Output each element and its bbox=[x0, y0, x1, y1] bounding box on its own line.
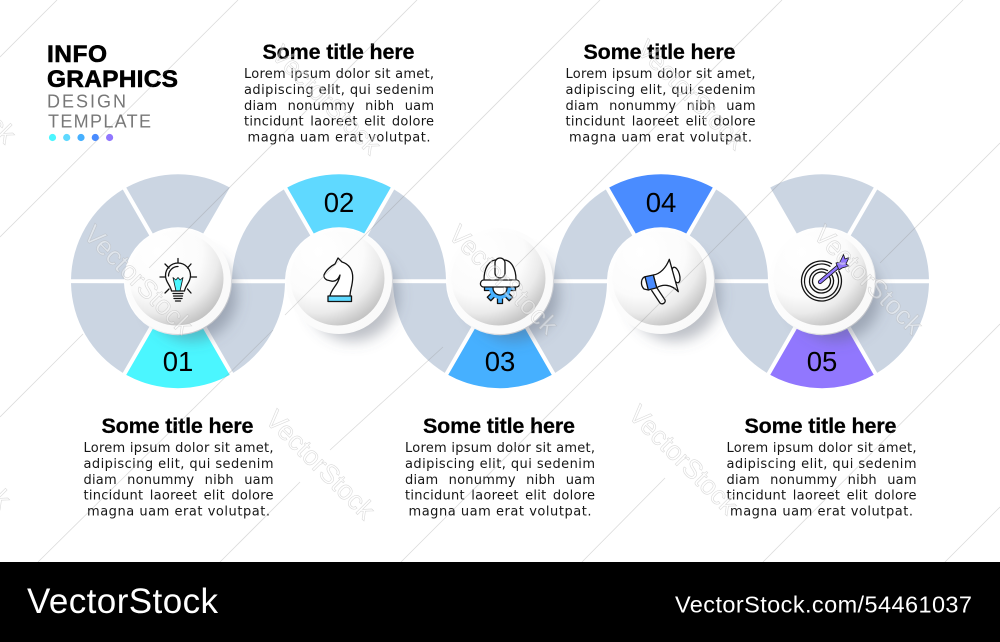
number 02: 02 bbox=[324, 187, 354, 218]
header: info graphics design template: TEMPLATE bbox=[48, 112, 151, 132]
text block 03: diam nonummy nibh uam bbox=[405, 473, 595, 488]
text block 03: tincidunt laoreet elit dolore bbox=[405, 489, 595, 504]
icon: light bulb bbox=[160, 258, 196, 301]
text block 03: adipiscing elit, qui sedenim bbox=[405, 457, 595, 472]
text block 01: adipiscing elit, qui sedenim bbox=[84, 457, 274, 472]
sphere 1 bbox=[125, 228, 237, 341]
watermark: VectorStock text bbox=[0, 28, 1000, 526]
watermark: VectorStock text: VectorStock bbox=[78, 219, 199, 341]
text block 05: adipiscing elit, qui sedenim bbox=[726, 457, 916, 472]
icon: chess knight bbox=[324, 258, 353, 302]
header: info graphics design template: INFO bbox=[47, 41, 107, 68]
text block 02: magna uam erat volutpat. bbox=[248, 130, 430, 146]
number 04: 04 bbox=[646, 187, 676, 218]
watermark: VectorStock text: VectorStock bbox=[266, 39, 387, 161]
footer bar: VectorStock bbox=[27, 582, 218, 621]
text block 02: diam nonummy nibh uam bbox=[244, 99, 434, 114]
text block 05: Some title here bbox=[744, 414, 897, 438]
text block 04: magna uam erat volutpat. bbox=[569, 130, 752, 146]
icon: target with arrow bbox=[801, 254, 849, 301]
text block 01: Some title here bbox=[102, 414, 254, 438]
text block 04: adipiscing elit, qui sedenim bbox=[566, 83, 756, 98]
text block 05: magna uam erat volutpat. bbox=[730, 504, 913, 520]
text block 05 bbox=[726, 414, 916, 520]
text block 01: Lorem ipsum dolor sit amet, bbox=[84, 441, 274, 456]
ring segments: circle 1 bbox=[45, 143, 285, 420]
footer bar bbox=[0, 562, 1000, 642]
icon: helmet and gear bbox=[480, 258, 520, 304]
watermark: VectorStock text: VectorStock bbox=[443, 219, 564, 341]
text block 05: diam nonummy nibh uam bbox=[726, 473, 916, 488]
text block 04: diam nonummy nibh uam bbox=[566, 99, 756, 114]
number 03: 03 bbox=[485, 346, 515, 377]
header: info graphics design template: DESIGN bbox=[47, 92, 126, 112]
header: info graphics design template: GRAPHICS bbox=[47, 66, 178, 93]
ring segments: circle 2 bbox=[232, 143, 472, 302]
text block 04 bbox=[566, 40, 756, 146]
watermark: VectorStock text: VectorStock bbox=[623, 399, 744, 521]
icon: megaphone bbox=[641, 259, 682, 304]
text block 03: magna uam erat volutpat. bbox=[408, 504, 592, 520]
sphere 4 bbox=[608, 228, 720, 341]
text block 02 bbox=[244, 40, 434, 146]
watermark: VectorStock text: VectorStock bbox=[260, 404, 381, 526]
sphere 3 bbox=[447, 228, 559, 341]
text block 03: Lorem ipsum dolor sit amet, bbox=[405, 441, 595, 456]
sphere 2 bbox=[286, 228, 398, 341]
ring segments: circle 4 bbox=[554, 143, 794, 302]
footer bar: VectorStock.com/54461037 bbox=[675, 592, 972, 618]
ring segments: circle 5 bbox=[689, 143, 955, 420]
number 01: 01 bbox=[163, 346, 193, 377]
text block 01: diam nonummy nibh uam bbox=[84, 473, 274, 488]
watermark: VectorStock text: VectorStock bbox=[631, 34, 752, 156]
ring segments: circle 3 bbox=[367, 260, 607, 420]
header: info graphics design template bbox=[47, 41, 178, 141]
watermark: VectorStock text: VectorStock bbox=[808, 219, 929, 341]
text block 05: tincidunt laoreet elit dolore bbox=[726, 489, 916, 504]
text block 03 bbox=[405, 414, 595, 520]
text block 02: adipiscing elit, qui sedenim bbox=[244, 83, 434, 98]
text block 01 bbox=[84, 414, 274, 520]
text block 02: tincidunt laoreet elit dolore bbox=[244, 115, 434, 130]
text block 01: tincidunt laoreet elit dolore bbox=[84, 489, 274, 504]
text block 04: tincidunt laoreet elit dolore bbox=[566, 115, 756, 130]
text block 02: Lorem ipsum dolor sit amet, bbox=[244, 67, 434, 82]
text block 01: magna uam erat volutpat. bbox=[87, 504, 270, 520]
text block 05: Lorem ipsum dolor sit amet, bbox=[726, 441, 916, 456]
text block 03: Some title here bbox=[423, 414, 575, 438]
text block 04: Some title here bbox=[584, 40, 736, 64]
text block 04: Lorem ipsum dolor sit amet, bbox=[566, 67, 756, 82]
number 05: 05 bbox=[807, 346, 837, 377]
text block 02: Some title here bbox=[262, 40, 415, 64]
sphere 5 bbox=[769, 228, 881, 341]
